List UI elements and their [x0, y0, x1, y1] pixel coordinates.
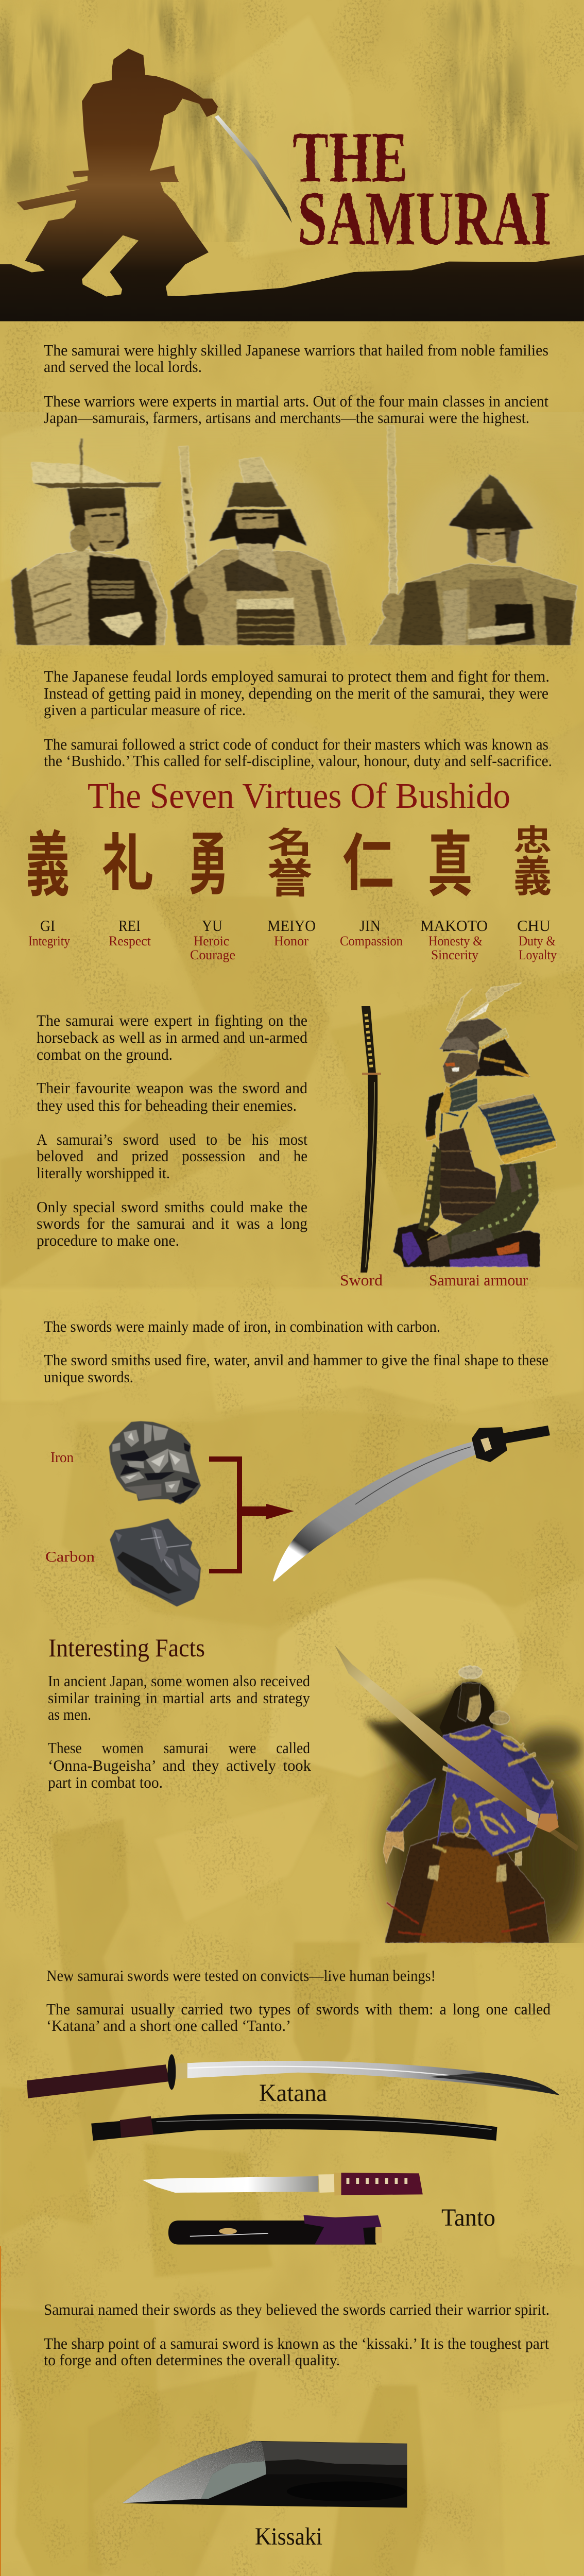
seven virtue labels: REI [118, 917, 141, 935]
text: fighting and swords [37, 1011, 307, 1249]
text: sword materials: The sword smiths used fire, water, anvil and hammer to give the final shape to these [44, 1351, 548, 1369]
seven virtue labels: MEIYO [267, 917, 316, 935]
text: naming and kissaki: to forge and often determines the overall quality. [44, 2351, 340, 2369]
armour left sleeve [418, 1143, 441, 1232]
text: women warriors: as men. [48, 1705, 91, 1723]
heading: Interesting Facts: Interesting Facts [48, 1633, 205, 1662]
seven virtue labels: YU [202, 917, 222, 935]
icon: tanto scabbard [168, 2215, 382, 2245]
kanji row: 勇 [188, 828, 228, 903]
paragraph: feudal lords and Bushido: Instead of getting paid in money, depending on the merit of the samurai, they were [44, 684, 548, 702]
text: sword materials: The swords were mainly made of iron, in combination with carbon. [44, 1317, 440, 1335]
icon: tanto blade [142, 2173, 423, 2196]
seven virtue labels: Compassion [340, 934, 403, 948]
label: Tanto: Tanto [441, 2204, 495, 2231]
seven virtue labels: JIN [359, 917, 381, 935]
text: fighting and swords: procedure to make one. [37, 1231, 179, 1249]
text: fighting and swords: A samurai’s sword used to be his most [37, 1130, 307, 1148]
seven virtue labels: Integrity [28, 934, 70, 948]
paragraph: feudal lords and Bushido: the ‘Bushido.’ This called for self-discipline, valour, honour, duty and self-sacrifice. [44, 752, 552, 770]
seven virtue labels: Respect [109, 934, 151, 948]
text: sword materials [44, 1317, 548, 1386]
text: fighting and swords: combat on the ground. [37, 1045, 173, 1063]
blue armour [436, 1725, 558, 1857]
figure: right samurai [369, 426, 577, 646]
title: The Samurai [293, 117, 551, 261]
text: fighting and swords: Their favourite weapon was the sword and [37, 1079, 307, 1097]
seven virtue labels: Honesty & [428, 934, 483, 948]
painting: woman warrior [335, 1645, 584, 1962]
woman's sword [335, 1645, 532, 1819]
seven virtue labels: MAKOTO [420, 917, 488, 935]
face [463, 1688, 481, 1721]
text: fighting and swords: swords for the samurai and it was a long [37, 1214, 307, 1232]
text: fighting and swords: beloved and prized possession and he [37, 1147, 307, 1165]
seven virtue labels [28, 917, 557, 962]
armour crest [446, 982, 522, 1032]
text: women warriors: These women samurai were called [48, 1739, 310, 1757]
text: women warriors: similar training in martial arts and strategy [48, 1689, 310, 1707]
label: Kissaki: Kissaki [255, 2523, 322, 2550]
seven virtue labels: Duty & [519, 934, 556, 948]
skirt [385, 1833, 549, 1943]
armour helmet [475, 1039, 530, 1077]
label: Katana: Katana [259, 2079, 327, 2107]
seven virtue labels: Sincerity [431, 947, 478, 962]
icon: katana blade [27, 2054, 560, 2098]
diagram: iron plus carbon makes sword [45, 1421, 550, 1606]
arrow: bracket combining materials [209, 1456, 294, 1573]
paragraph: feudal lords and Bushido: The samurai followed a strict code of conduct for their masters which was known as [44, 735, 548, 753]
kanji row: 誉 [267, 857, 313, 902]
paragraph: feudal lords and Bushido: The Japanese feudal lords employed samurai to protect them and fight for them. [44, 667, 549, 685]
text: naming and kissaki: Samurai named their swords as they believed the swords carried their warrior spirit. [44, 2300, 549, 2318]
armour right arm [443, 1161, 539, 1255]
sword and armour captions [340, 1271, 528, 1289]
sword and armour captions: Samurai armour [429, 1271, 528, 1289]
kanji row: 義 [513, 854, 552, 901]
armour neck [450, 1078, 477, 1112]
text: fighting and swords: they used this for beheading their enemies. [37, 1096, 297, 1114]
flowing hair [364, 1682, 496, 1798]
seven virtue labels: Honor [274, 934, 308, 948]
icon: katana scabbard [91, 2114, 497, 2141]
paragraph: feudal lords and Bushido: given a particular measure of rice. [44, 701, 246, 719]
text: women warriors: part in combat too. [48, 1773, 163, 1791]
figure: left samurai [11, 438, 167, 646]
kanji row: 義 [26, 826, 70, 905]
kanji row: 名 [267, 827, 313, 860]
icon: samurai armour [393, 982, 557, 1267]
text: sword testing and types: New samurai swords were tested on convicts—live human beings! [46, 1967, 436, 1985]
seven virtue labels: Loyalty [519, 947, 557, 962]
kanji row: 忠 [513, 824, 552, 857]
text: fighting and swords: horseback as well as in armed and un-armed [37, 1028, 307, 1046]
icon: kissaki blade tip [122, 2441, 407, 2507]
label: iron: Iron [50, 1449, 74, 1466]
intro text: These warriors were experts in martial arts. Out of the four main classes in ancient [44, 392, 548, 410]
figure: middle samurai [170, 446, 347, 646]
kanji row: 真 [427, 827, 473, 906]
heading: The Seven Virtues Of Bushido: The Seven Virtues Of Bushido [88, 776, 510, 816]
text: sword materials: unique swords. [44, 1368, 133, 1386]
headpiece [458, 1666, 483, 1679]
shoulder fur [489, 1711, 510, 1725]
hero silhouette: samurai drawing sword on hill [0, 48, 584, 321]
intro text: The samurai were highly skilled Japanese warriors that hailed from noble families [44, 341, 548, 359]
kanji row [26, 824, 552, 906]
photo: three samurai in armour [0, 412, 584, 646]
icon: forged sword [273, 1426, 550, 1582]
title: The Samurai: THE [293, 117, 408, 197]
seven virtue labels: Courage [190, 947, 235, 962]
label: carbon: Carbon [45, 1549, 95, 1565]
text: naming and kissaki: The sharp point of a samurai sword is known as the ‘kissaki.’ It is the toughest part [44, 2334, 549, 2352]
text: sword testing and types: The samurai usually carried two types of swords with them: a long one called [46, 2000, 551, 2018]
seven virtue labels: Heroic [194, 934, 229, 948]
text: women warriors: ‘Onna-Bugeisha’ and they actively took [48, 1756, 311, 1774]
text: fighting and swords: The samurai were expert in fighting on the [37, 1011, 307, 1029]
icon: sheathed sword [360, 1006, 381, 1273]
seven virtue labels: CHU [517, 917, 551, 935]
seven virtue labels: GI [40, 917, 55, 935]
text: fighting and swords: literally worshipped it. [37, 1164, 170, 1182]
armour skirt [393, 1222, 540, 1267]
kanji row: 仁 [342, 830, 394, 898]
text: fighting and swords: Only special sword smiths could make the [37, 1198, 307, 1216]
text: naming and kissaki [44, 2300, 549, 2369]
text: women warriors [48, 1672, 311, 1791]
icon: carbon rock [110, 1518, 201, 1606]
armour shoulder guard [477, 1094, 557, 1164]
sword and armour captions: Sword [340, 1271, 383, 1289]
armour left shoulder [425, 1092, 444, 1140]
text: sword testing and types: ‘Katana’ and a short one called ‘Tanto.’ [46, 2016, 291, 2035]
text: sword testing and types [46, 1967, 551, 2035]
intro text: Japan—samurais, farmers, artisans and merchants—the samurai were the highest. [44, 409, 529, 427]
painting haze [384, 1717, 584, 1962]
intro text: and served the local lords. [44, 358, 202, 376]
armour chest [438, 1127, 497, 1228]
paragraph: feudal lords and Bushido [44, 667, 552, 770]
kanji row: 礼 [102, 830, 153, 898]
icon: drawn sword [215, 115, 292, 223]
text: women warriors: In ancient Japan, some women also received [48, 1672, 310, 1690]
icon: iron ore [109, 1421, 201, 1504]
gold armour ornaments [391, 1730, 553, 1854]
left arm and hand [386, 1778, 436, 1835]
photo haze [24, 463, 559, 580]
intro text [44, 341, 548, 427]
